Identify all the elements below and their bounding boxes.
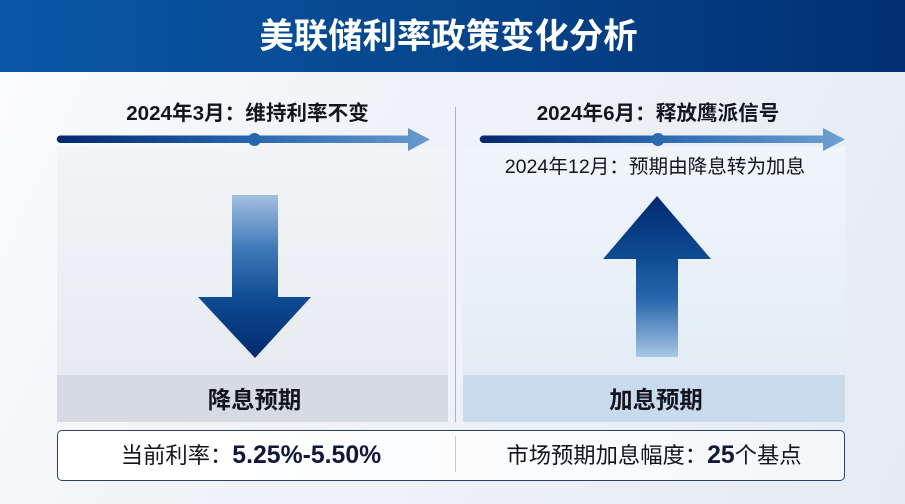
icon: up arrow xyxy=(603,196,711,357)
heading: March 2024: 2024年3月：维持利率不变 xyxy=(126,102,369,125)
label: rate cut expectation: 降息预期 xyxy=(208,387,301,413)
timeline: left xyxy=(57,128,430,151)
title: 美联储利率政策变化分析 xyxy=(259,18,638,56)
panel: rate cut expectation xyxy=(57,147,448,422)
label: rate hike expectation: 加息预期 xyxy=(609,387,703,413)
current rate: 当前利率：5.25%-5.50% xyxy=(121,442,381,469)
heading: June 2024: 2024年6月：释放鹰派信号 xyxy=(537,102,779,125)
label band: rate hike xyxy=(463,375,845,422)
label band: rate cut xyxy=(57,375,448,422)
title banner xyxy=(0,0,905,72)
timeline: right xyxy=(480,128,845,151)
info box xyxy=(57,430,845,481)
market expected hike: 市场预期加息幅度：25个基点 xyxy=(506,442,802,469)
subheading: December 2024: 2024年12月：预期由降息转为加息 xyxy=(505,156,805,178)
centre divider xyxy=(455,107,456,422)
panel: rate hike expectation xyxy=(463,147,845,422)
icon: down arrow xyxy=(198,195,311,358)
box divider xyxy=(455,436,456,472)
